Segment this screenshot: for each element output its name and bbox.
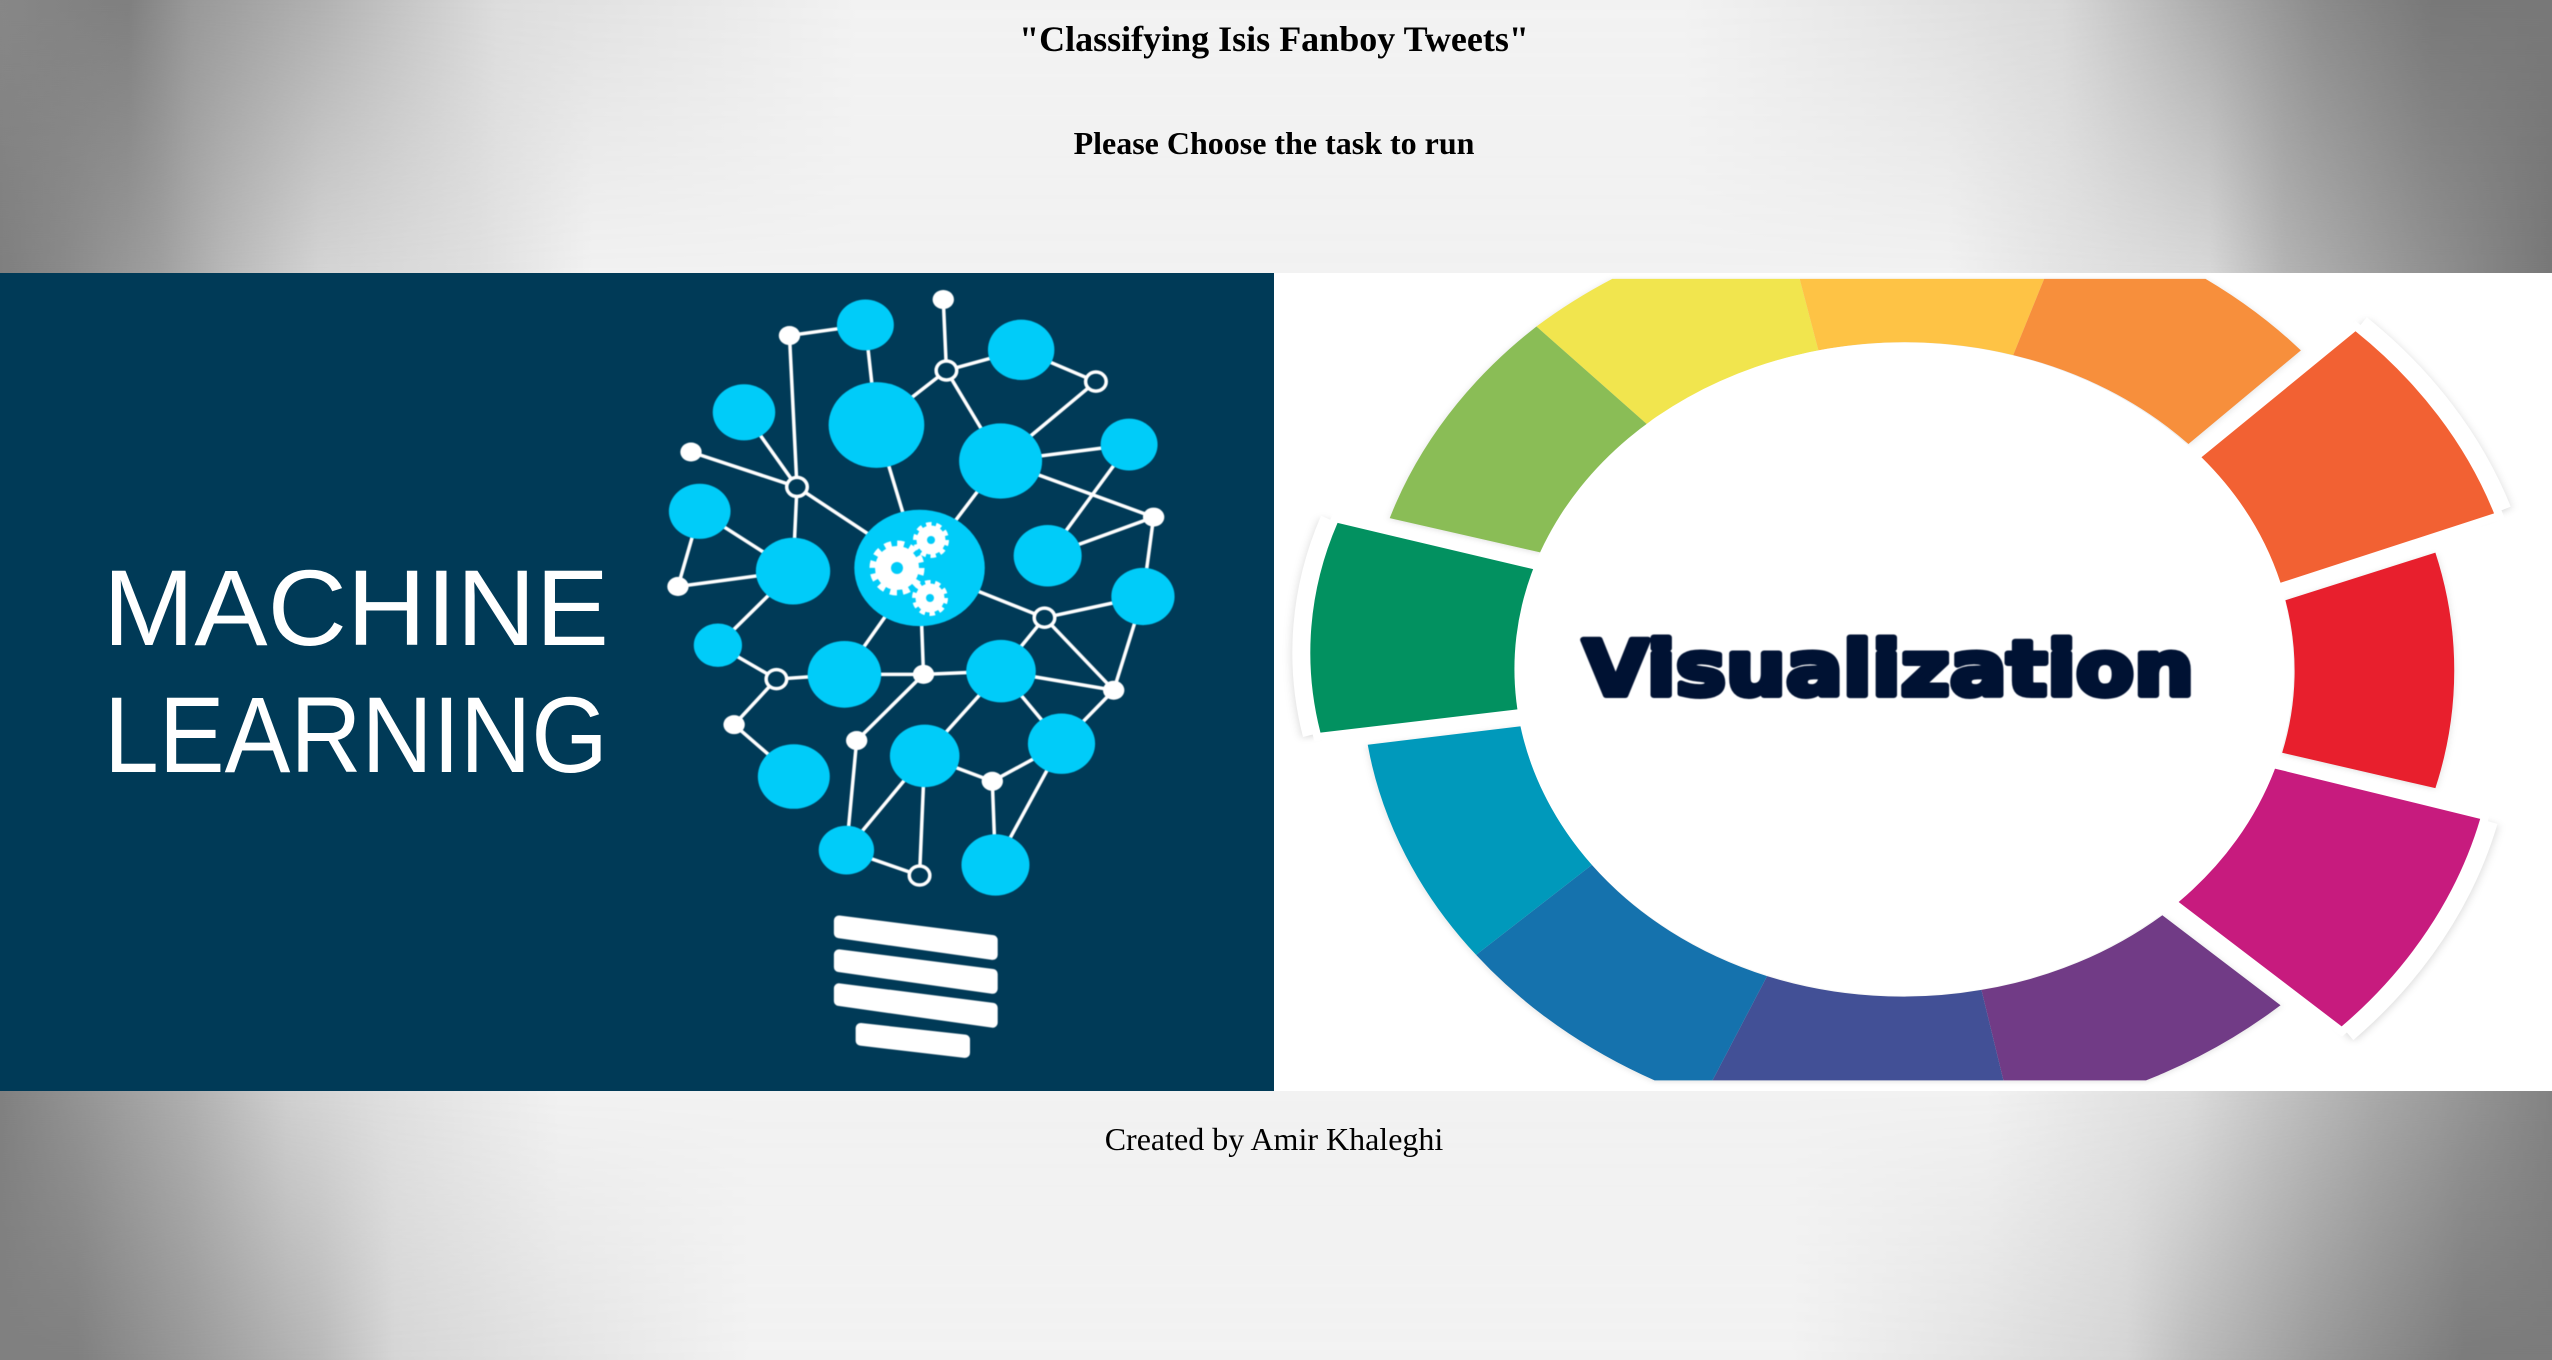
heading: machine learning [103, 547, 609, 795]
footer: credit: Created by Amir Khaleghi [1105, 1121, 1443, 1157]
heading: machine learning: MACHINE [103, 547, 609, 668]
background: bottom band [0, 1091, 2552, 1360]
title: "Classifying Isis Fanboy Tweets" [1019, 19, 1529, 59]
background: top band [0, 0, 2552, 273]
panel: machine learning [0, 273, 1274, 1091]
wheel: popped-out segments [1310, 331, 2494, 1026]
wheel: white centre [1514, 342, 2294, 996]
panel: visualization [1274, 273, 2552, 1091]
subtitle: task prompt: Please Choose the task to run [1074, 125, 1475, 161]
icon: gears [872, 524, 947, 614]
icon: neural network light bulb [667, 290, 1175, 1053]
heading: visualization: Visualization [1583, 624, 2194, 713]
heading: machine learning: LEARNING [104, 674, 608, 795]
wheel: white outer rims of popped-out segments [1310, 331, 2494, 1026]
chart: colour wheel [1310, 279, 2494, 1080]
icon: bulb base bars [839, 921, 993, 1053]
